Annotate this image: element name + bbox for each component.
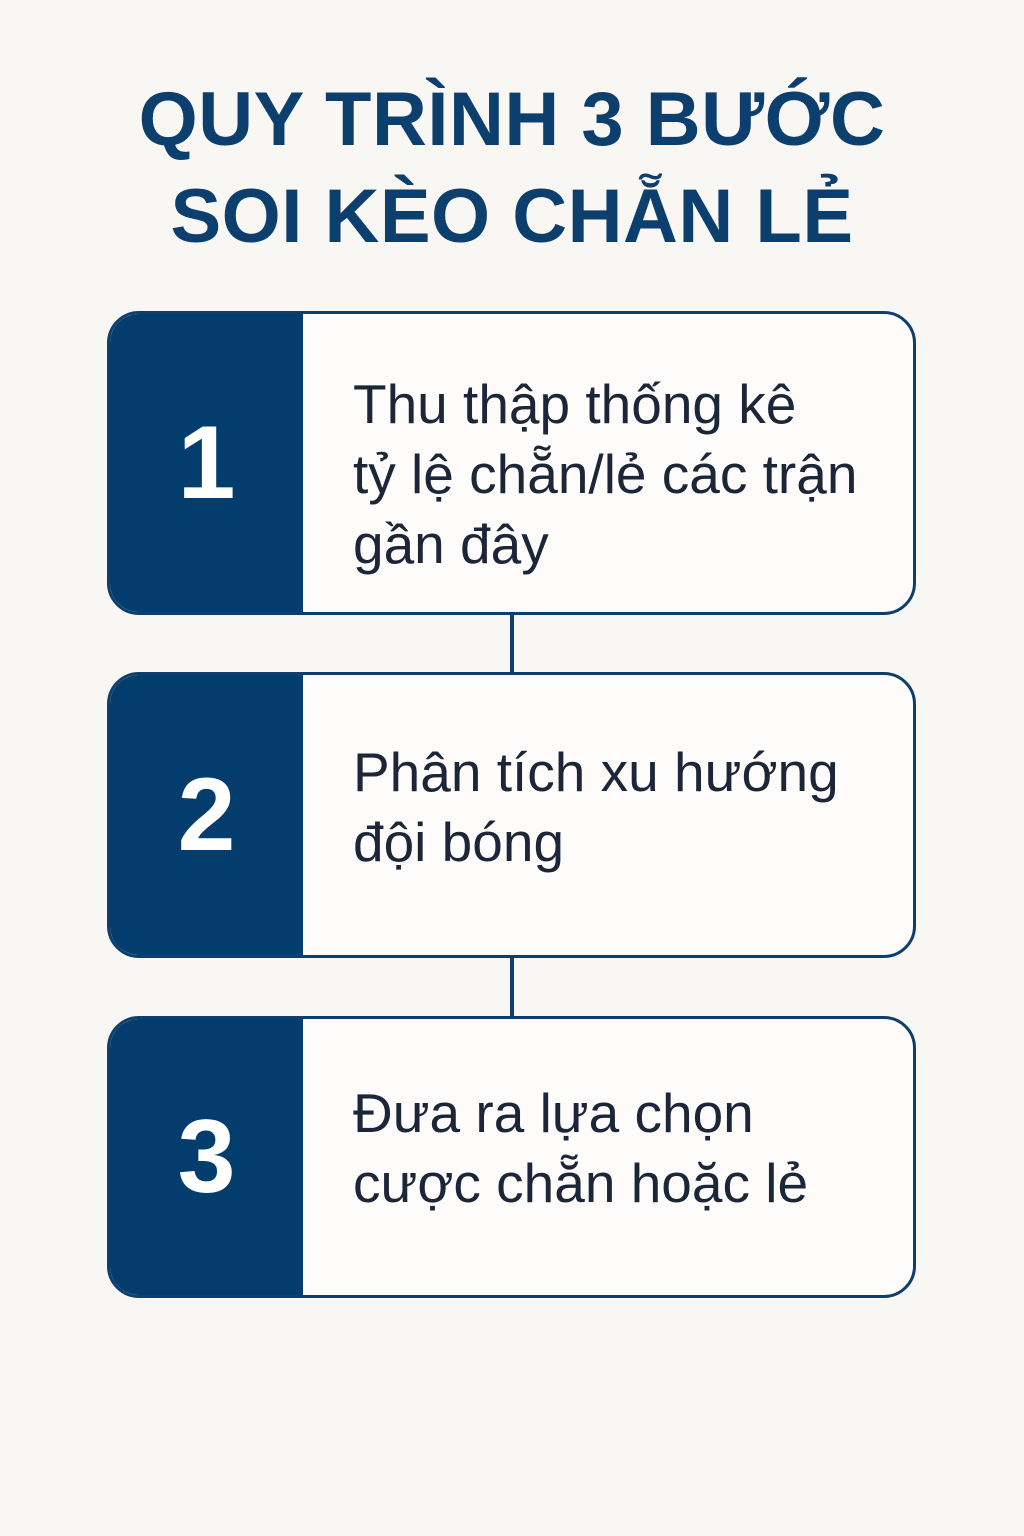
step 3: [107, 1016, 916, 1298]
connector 1-2: [510, 615, 514, 672]
step 1 text: gần đây: [353, 513, 549, 575]
number 3: [110, 1019, 303, 1295]
number 3: 3: [178, 1098, 235, 1214]
step 2 text: Phân tích xu hướng: [353, 741, 839, 803]
step 1: [107, 311, 916, 615]
step 3 text: Đưa ra lựa chọn: [353, 1082, 754, 1144]
title: [139, 77, 885, 259]
number 1: 1: [178, 404, 235, 520]
step 2 text: đội bóng: [353, 811, 564, 873]
connector 2-3: [510, 958, 514, 1016]
step 1 text: tỷ lệ chẵn/lẻ các trận: [353, 443, 857, 505]
step 2 text: [353, 741, 839, 873]
step 1 text: Thu thập thống kê: [353, 373, 796, 435]
step 3 text: [353, 1082, 808, 1214]
number 1: [110, 314, 303, 612]
number 2: [110, 675, 303, 955]
title: QUY TRÌNH 3 BƯỚC: [139, 77, 885, 162]
step 3 text: cược chẵn hoặc lẻ: [353, 1152, 808, 1214]
step 2: [107, 672, 916, 958]
title: SOI KÈO CHẴN LẺ: [170, 174, 854, 259]
number 2: 2: [178, 756, 235, 872]
step 1 text: [353, 373, 857, 575]
